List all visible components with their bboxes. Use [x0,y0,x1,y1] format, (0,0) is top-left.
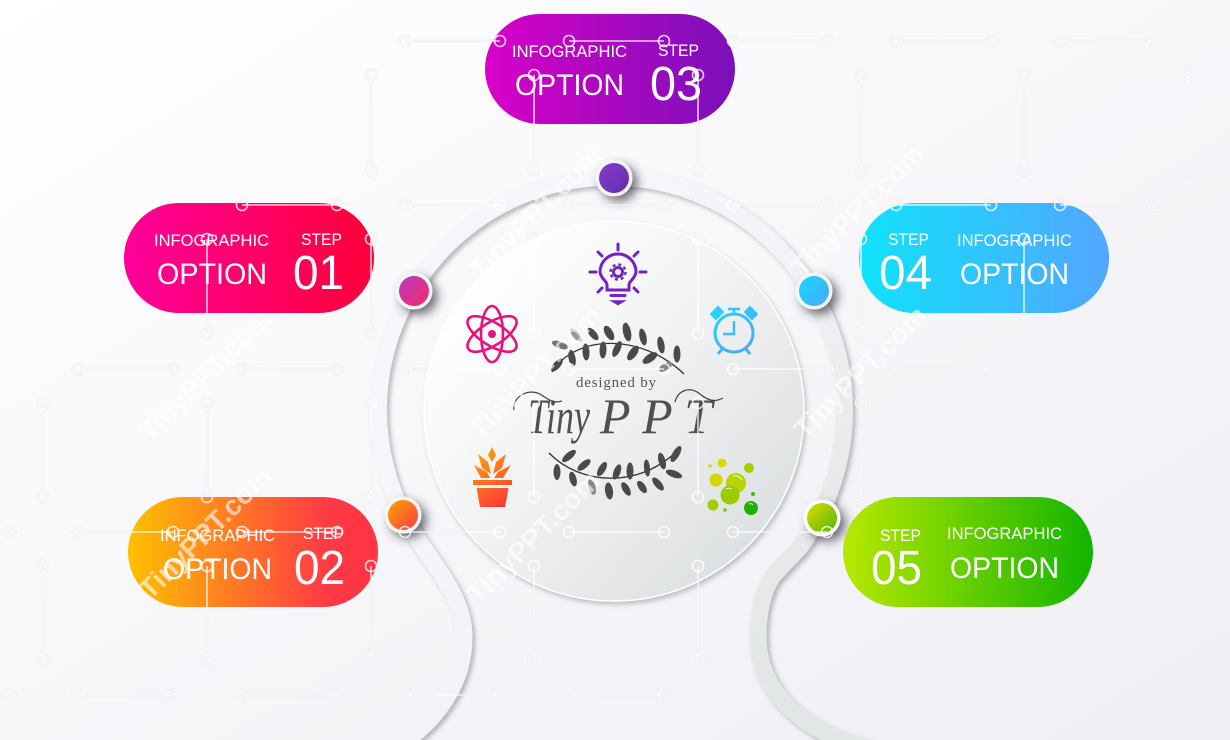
pill: step 01: INFOGRAPHIC [154,231,269,250]
designed by label: designed by [576,375,656,391]
watermarks [133,138,933,610]
top laurel branch [549,322,684,374]
watermarks: TinyPPT.com [133,460,278,605]
pill: step 05 [843,497,1093,607]
central disc [424,221,804,601]
icon: bubbles [708,458,758,515]
logo: TinyPPT laurel wreath [514,322,723,500]
pill: step 02: OPTION [163,553,272,586]
watermarks: TinyPPT.com [463,140,608,285]
node: right blue [796,272,832,310]
pill: step 01: OPTION [157,258,267,291]
icon: potted plant [473,447,512,507]
watermarks: TinyPPT.com [788,300,933,445]
pill: step 03 [485,14,735,124]
pill: step 01: STEP [301,230,342,249]
watermarks: TinyPPT.com [785,138,930,283]
pill: step 03: 03 [650,58,702,111]
pill: step 01: 01 [293,247,344,300]
pill: step 05: STEP [880,526,921,545]
node: left magenta [396,272,432,310]
pill: step 02: INFOGRAPHIC [160,526,275,545]
pill: step 04: 04 [879,247,932,300]
node: top purple [596,160,632,196]
icon: alarm clock [710,306,758,354]
pill: step 04 [859,203,1109,313]
TinyPPT script wordmark [514,388,723,444]
pill: step 05: INFOGRAPHIC [947,524,1062,543]
icon: light bulb with gear [590,244,646,304]
icon: atom [462,306,522,362]
watermarks: TinyPPT.com [133,303,278,448]
pill: step 02 [128,497,378,607]
pill: step 04: INFOGRAPHIC [957,231,1072,250]
pill: step 05: OPTION [950,552,1059,585]
pill: step 05: 05 [871,542,922,595]
pill: step 03: INFOGRAPHIC [512,42,627,61]
pill: step 01 [124,203,374,313]
pill: step 04: OPTION [960,258,1069,291]
TinyPPT script wordmark: Tiny [528,388,591,444]
bottom laurel branch [549,444,684,500]
pill: step 03: OPTION [515,69,624,102]
curved ring track [378,177,870,740]
watermarks: TinyPPT.com [463,300,608,445]
pill: step 02: STEP [303,524,344,543]
pill: step 04: STEP [888,230,929,249]
node: lower-right lime [804,500,840,536]
TinyPPT script wordmark: PPT [599,388,715,444]
pill: step 03: STEP [658,41,699,60]
watermarks: TinyPPT.com [461,465,606,610]
pill: step 02: 02 [294,542,345,595]
node: lower-left orange [384,496,422,534]
